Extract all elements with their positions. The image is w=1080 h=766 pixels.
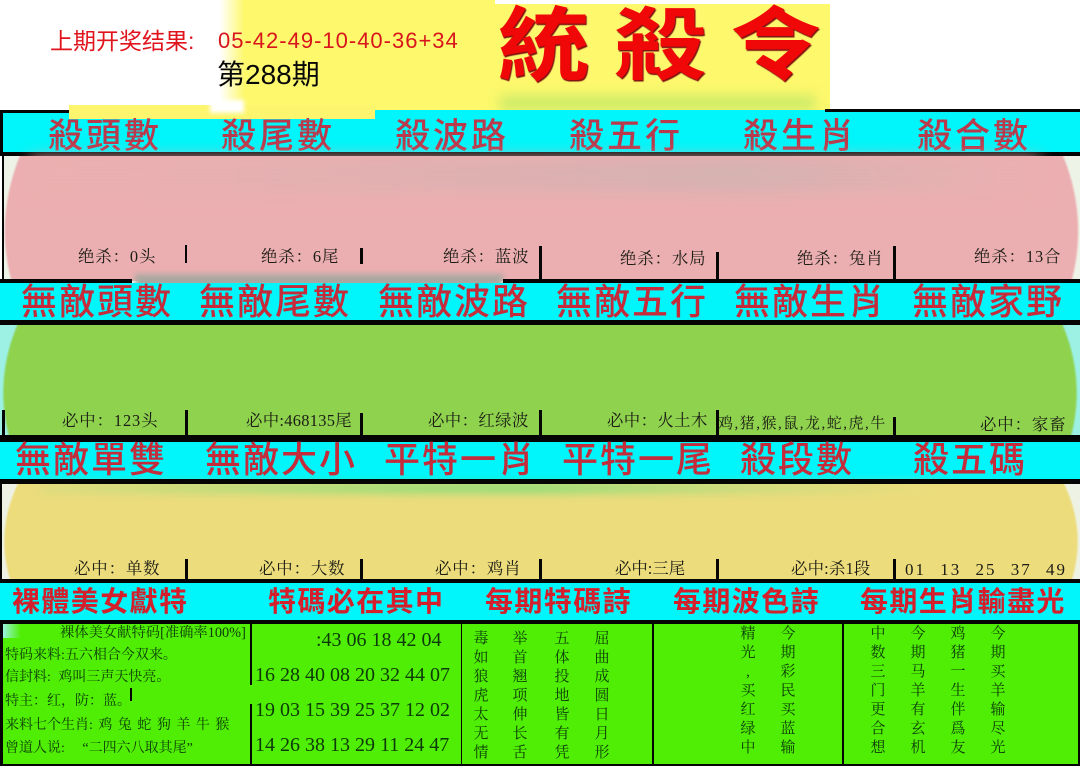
label: 必中 468135尾: 必中:468135尾 xyxy=(246,411,352,430)
zodiac column 4: 期 xyxy=(990,645,1006,661)
panel: number grid xyxy=(252,624,461,764)
green blur at yellow top xyxy=(40,484,940,492)
last draw result xyxy=(50,28,459,54)
heading: 殺段數: 殺段數 xyxy=(740,431,854,483)
poem column 3: 体 xyxy=(554,650,570,666)
row 1 band: kill headings xyxy=(0,110,1080,156)
header lower green tint xyxy=(500,96,815,110)
heading: 無敵波路: 無敵波路 xyxy=(378,273,530,325)
zodiac column 1: 三 xyxy=(870,664,886,680)
zodiac column 4: 羊 xyxy=(990,683,1006,699)
heading: 殺五行: 殺五行 xyxy=(569,108,683,159)
zodiac column 3: 一 xyxy=(950,664,966,680)
poem column 2: 长 xyxy=(512,726,528,742)
zodiac column 1: 合 xyxy=(870,721,886,737)
colour poem column 2 xyxy=(780,625,796,756)
poem column 1: 太 xyxy=(473,707,488,723)
heading: 無敵尾數: 無敵尾數 xyxy=(199,273,351,325)
label: 必中 家畜: 必中：家畜 xyxy=(980,415,1066,434)
panel: special code tips xyxy=(3,624,250,764)
heading: 殺生肖: 殺生肖 xyxy=(743,108,857,159)
heading: 每期波色詩: 每期波色詩 xyxy=(673,580,820,620)
zodiac column 3: 鸡 xyxy=(950,626,966,642)
poem column 3: 皆 xyxy=(554,707,570,723)
heading: 無敵家野: 無敵家野 xyxy=(912,273,1064,325)
zodiac column 2: 今 xyxy=(910,626,926,642)
colour poem column 2: 蓝 xyxy=(780,721,796,737)
grey smudge at pink bottom xyxy=(135,274,503,288)
heading: 殺波路: 殺波路 xyxy=(395,108,509,159)
last draw result: 05-42-49-10-40-36+34 xyxy=(218,28,459,53)
gap in frame between tip and grid xyxy=(248,685,254,704)
zodiac column 2: 玄 xyxy=(910,721,926,737)
heading: 無敵生肖: 無敵生肖 xyxy=(734,273,886,325)
heading: 每期特碼詩: 每期特碼詩 xyxy=(485,580,632,620)
heading: 殺五碼: 殺五碼 xyxy=(913,431,1027,483)
heading: 每期生肖輸盡光: 每期生肖輸盡光 xyxy=(860,580,1066,620)
poem column 1: 毒 xyxy=(473,631,488,647)
zodiac column 1: 想 xyxy=(870,740,886,756)
numbers row 1: :43 06 18 42 04 xyxy=(316,629,442,651)
poem column 1: 虎 xyxy=(473,688,488,704)
colour poem column 1: 买 xyxy=(740,683,756,699)
heading: 無敵大小: 無敵大小 xyxy=(205,431,357,483)
label: 绝杀 水局: 绝杀：水局 xyxy=(620,249,706,268)
grey smudge at pink top xyxy=(30,158,1040,192)
panel: special code poem xyxy=(462,624,652,764)
heading: 殺尾數: 殺尾數 xyxy=(221,108,335,159)
tip line 3: 特主：红，防：蓝。 xyxy=(5,694,131,709)
zodiac column 1: 门 xyxy=(870,683,886,699)
zodiac column 4: 买 xyxy=(990,664,1006,680)
poem column 4: 圆 xyxy=(594,688,610,704)
numbers row 2: 16 28 40 08 20 32 44 07 xyxy=(255,664,450,686)
poem column 4: 曲 xyxy=(594,650,610,666)
row 3 band: headings xyxy=(0,442,1080,479)
zodiac column 4: 今 xyxy=(990,626,1006,642)
zodiac column 2: 马 xyxy=(910,664,926,680)
poem column 2: 伸 xyxy=(512,707,528,723)
poem column 3: 投 xyxy=(554,669,570,685)
poem column 1: 如 xyxy=(473,650,488,666)
tip line 2: 信封料: 鸡叫三声天快亮。 xyxy=(5,670,170,685)
tip line 1: 特码来料:五六相合今双来。 xyxy=(5,648,177,663)
panel: yellow results xyxy=(2,484,1080,580)
label: 必中 三尾: 必中:三尾 xyxy=(615,559,685,578)
poem column 1: 无 xyxy=(473,726,488,742)
colour poem column 1: 红 xyxy=(740,702,756,718)
header yellow backdrop xyxy=(220,0,830,110)
zodiac column 1 xyxy=(870,625,886,756)
zodiac column 3 xyxy=(950,625,966,756)
zodiac column 1: 数 xyxy=(870,645,886,661)
heading: 無敵單雙: 無敵單雙 xyxy=(15,431,167,483)
poem column 3: 凭 xyxy=(554,745,570,761)
label: 必中 杀1段: 必中:杀1段 xyxy=(791,559,871,578)
zodiac column 4: 光 xyxy=(990,740,1006,756)
label: 绝杀 兔肖: 绝杀：兔肖 xyxy=(797,249,883,268)
colour poem column 1: , xyxy=(746,664,750,680)
row 2 band: invincible headings xyxy=(0,283,1080,320)
heading: 平特一肖: 平特一肖 xyxy=(384,431,536,483)
colour poem column 2: 买 xyxy=(780,702,796,718)
panel: green must-hit results xyxy=(0,325,1080,438)
poem column 2 xyxy=(512,630,528,761)
tip line 4: 来料七个生肖: 鸡 兔 蛇 狗 羊 牛 猴 xyxy=(5,718,229,733)
colour poem column 2: 彩 xyxy=(780,664,796,680)
heading: 殺合數: 殺合數 xyxy=(917,108,1031,159)
label: 绝杀 6尾: 绝杀：6尾 xyxy=(261,247,339,266)
zodiac column 1: 中 xyxy=(870,626,886,642)
zodiac column 3: 生 xyxy=(950,683,966,699)
colour poem column 1: 绿 xyxy=(740,721,756,737)
poem column 3 xyxy=(554,631,570,761)
label: 杀五码 numbers: 01 13 25 37 49 xyxy=(905,560,1067,579)
poem column 3: 五 xyxy=(554,631,570,647)
colour poem column 2: 输 xyxy=(780,740,796,756)
last draw result: 上期开奖结果: xyxy=(50,28,194,54)
poem column 4: 成 xyxy=(594,669,610,685)
tip corner highlight xyxy=(3,624,21,638)
colour poem column 2: 民 xyxy=(780,683,796,699)
zodiac column 3: 友 xyxy=(950,740,966,756)
poem column 4: 日 xyxy=(594,707,610,723)
poem column 2: 项 xyxy=(512,688,528,704)
zodiac column 3: 伴 xyxy=(950,702,966,718)
label: 必中 单数: 必中：单数 xyxy=(74,559,160,578)
tip title: 裸体美女献特码[准确率100%] xyxy=(60,625,246,641)
zodiac column 2: 期 xyxy=(910,645,926,661)
heading: 裸體美女獻特: 裸體美女獻特 xyxy=(12,580,188,620)
label: 必中 大数: 必中：大数 xyxy=(259,559,345,578)
label: 绝杀 0头: 绝杀：0头 xyxy=(78,247,156,266)
heading: 無敵五行: 無敵五行 xyxy=(556,273,708,325)
colour poem column 1 xyxy=(740,625,756,756)
poem column 2: 举 xyxy=(512,631,528,647)
issue number: 第288期 xyxy=(217,59,320,90)
heading: 平特一尾: 平特一尾 xyxy=(562,431,714,483)
zodiac column 4: 尽 xyxy=(990,721,1006,737)
poem column 4 xyxy=(594,630,610,761)
colour poem column 1: 中 xyxy=(740,740,756,756)
poem column 4: 月 xyxy=(594,726,610,742)
row 4 band: headings xyxy=(0,583,1080,620)
yellow overlap on row 1 xyxy=(69,105,375,119)
poem column 4: 形 xyxy=(594,745,610,761)
label: 必中 鸡肖: 必中：鸡肖 xyxy=(435,559,521,578)
label: 必中 红绿波: 必中：红绿波 xyxy=(428,411,529,430)
numbers row 4: 14 26 38 13 29 11 24 47 xyxy=(255,734,449,756)
colour poem column 2: 今 xyxy=(780,626,796,642)
zodiac column 1: 更 xyxy=(870,702,886,718)
heading: 無敵頭數: 無敵頭數 xyxy=(21,273,173,325)
zodiac column 2: 机 xyxy=(910,740,926,756)
panel: zodiac poem xyxy=(844,624,1078,764)
poem column 1: 情 xyxy=(473,745,488,761)
white strip above title xyxy=(495,0,830,4)
heading: 特碼必在其中: 特碼必在其中 xyxy=(268,580,444,620)
zodiac column 4: 输 xyxy=(990,702,1006,718)
label: 绝杀 蓝波: 绝杀：蓝波 xyxy=(443,247,529,266)
tip line 5: 曾道人说: “二四六八取其尾” xyxy=(5,741,193,756)
zodiac column 4 xyxy=(990,625,1006,756)
bottom frame xyxy=(0,620,1080,766)
zodiac column 2: 羊 xyxy=(910,683,926,699)
label: 八肖: 鸡,猪,猴,鼠,龙,蛇,虎,牛 xyxy=(718,416,887,432)
tip mark xyxy=(130,688,132,701)
poem column 2: 舌 xyxy=(512,745,528,761)
poem column 3: 地 xyxy=(554,688,570,704)
poem column 1 xyxy=(473,630,488,761)
colour poem column 2: 期 xyxy=(780,645,796,661)
panel: pink kill results xyxy=(3,156,1080,281)
label: 必中 123头: 必中：123头 xyxy=(62,411,158,430)
zodiac column 3: 爲 xyxy=(950,721,966,737)
colour poem column 1: 光 xyxy=(740,645,756,661)
colour poem column 1: 精 xyxy=(740,626,756,642)
panel: wave colour poem xyxy=(654,624,842,764)
poem column 2: 首 xyxy=(512,650,528,666)
poem column 1: 狼 xyxy=(473,669,488,685)
poem column 3: 有 xyxy=(554,726,570,742)
label: 必中 火土木: 必中：火土木 xyxy=(607,411,708,430)
zodiac column 2 xyxy=(910,625,926,756)
zodiac column 3: 猪 xyxy=(950,645,966,661)
zodiac column 2: 有 xyxy=(910,702,926,718)
heading: 殺頭數: 殺頭數 xyxy=(48,108,162,159)
poem column 2: 翘 xyxy=(512,669,528,685)
label: 绝杀 13合: 绝杀：13合 xyxy=(974,247,1061,266)
poem column 4: 屈 xyxy=(594,631,610,647)
numbers row 3: 19 03 15 39 25 37 12 02 xyxy=(255,699,450,721)
